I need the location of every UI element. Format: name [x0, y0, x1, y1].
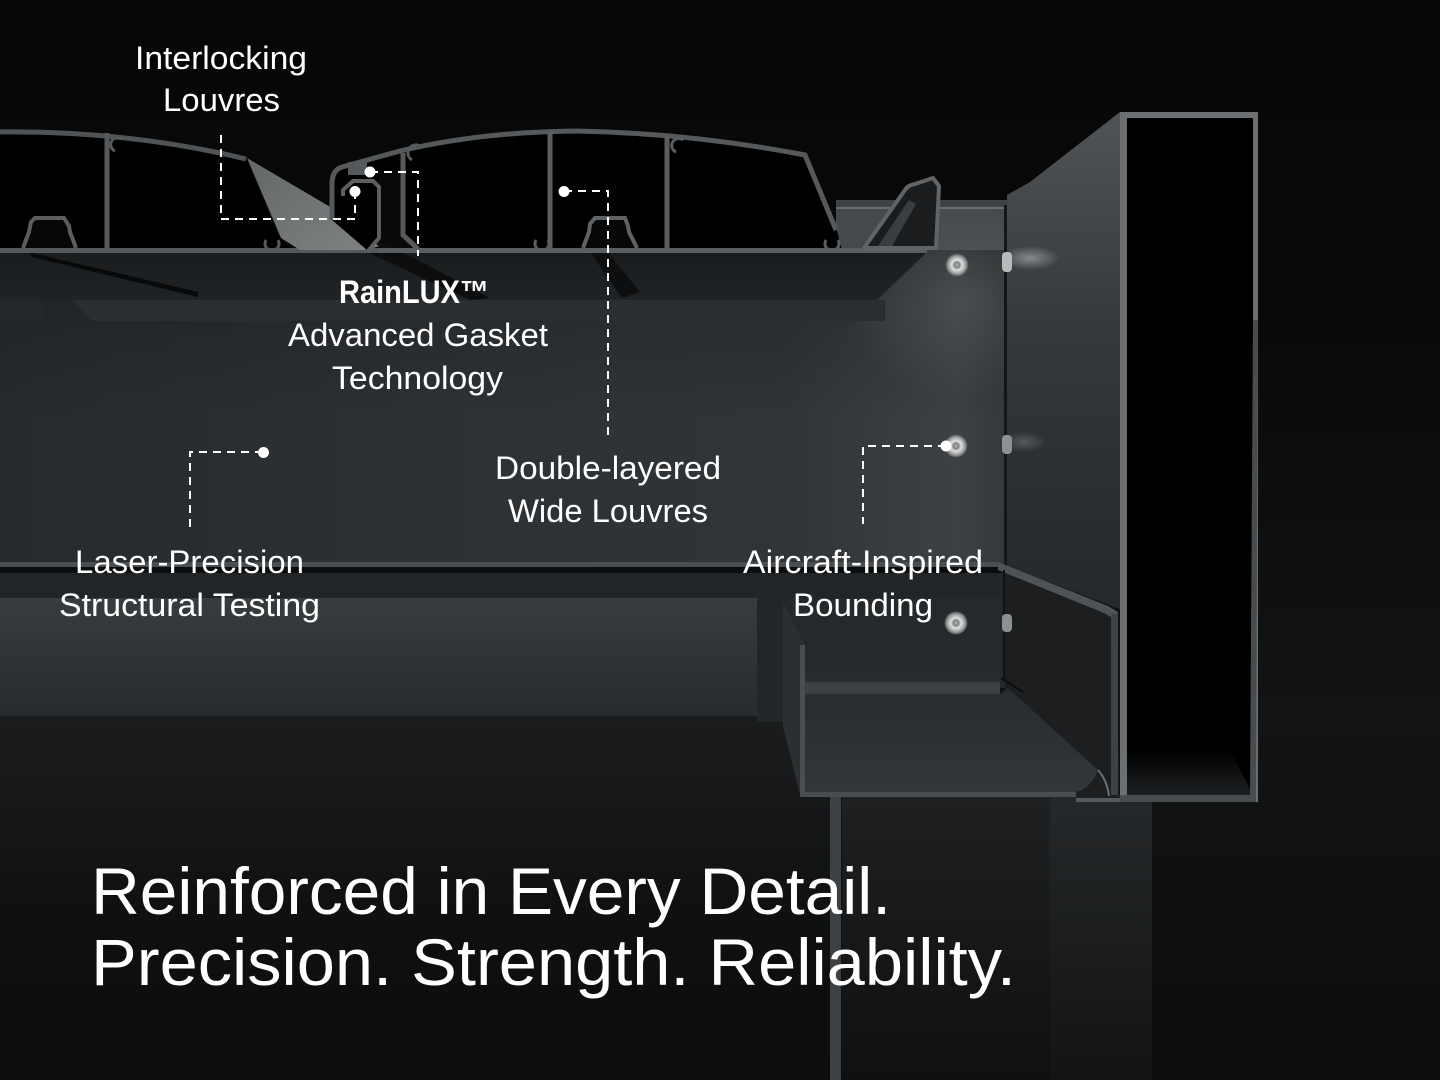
- callout: Interlocking Louvres: [135, 40, 360, 219]
- heading: Precision. Strength. Reliability.: [91, 925, 1016, 999]
- panel: gutter strip below louvres: [0, 240, 927, 321]
- callout: RainLUX Advanced Gasket Technology: RainLUX™: [339, 274, 489, 310]
- panel: side wall and rectangular post: [1000, 112, 1258, 802]
- callout: Laser-Precision Structural Testing: Structural Testing: [59, 587, 320, 623]
- callout: Aircraft-Inspired Bounding: Bounding: [793, 587, 933, 623]
- callout: Double-layered Wide Louvres: Double-layered: [495, 450, 721, 486]
- panel: gutter: [783, 562, 1120, 802]
- icon: clip profile: [864, 178, 939, 248]
- callout: RainLUX Advanced Gasket Technology: [288, 166, 548, 396]
- chart: right louvre profile: [332, 130, 927, 252]
- chart: left louvre profile: [0, 130, 378, 251]
- callout: RainLUX Advanced Gasket Technology: Technology: [332, 360, 503, 396]
- heading: Reinforced in Every Detail.: [91, 854, 891, 928]
- callout: RainLUX Advanced Gasket Technology: Advanced Gasket: [288, 317, 548, 353]
- panel: end plate: [836, 200, 1007, 570]
- icon: grey louvre wedge: [247, 158, 379, 250]
- callout: Interlocking Louvres: Louvres: [163, 82, 280, 118]
- panel: support post: [830, 795, 1152, 1080]
- callout: Double-layered Wide Louvres: Wide Louvres: [508, 493, 708, 529]
- callout: Double-layered Wide Louvres: [495, 186, 721, 529]
- callout: Laser-Precision Structural Testing: Laser-Precision: [75, 544, 304, 580]
- panel: main wall: [0, 200, 1090, 722]
- heading: [91, 854, 1016, 999]
- callout: Laser-Precision Structural Testing: [59, 447, 320, 623]
- callout: Aircraft-Inspired Bounding: [743, 440, 983, 623]
- icon: bolts: [944, 252, 1012, 634]
- callout: Interlocking Louvres: Interlocking: [135, 40, 307, 76]
- callout: Aircraft-Inspired Bounding: Aircraft-Inspired: [743, 544, 983, 580]
